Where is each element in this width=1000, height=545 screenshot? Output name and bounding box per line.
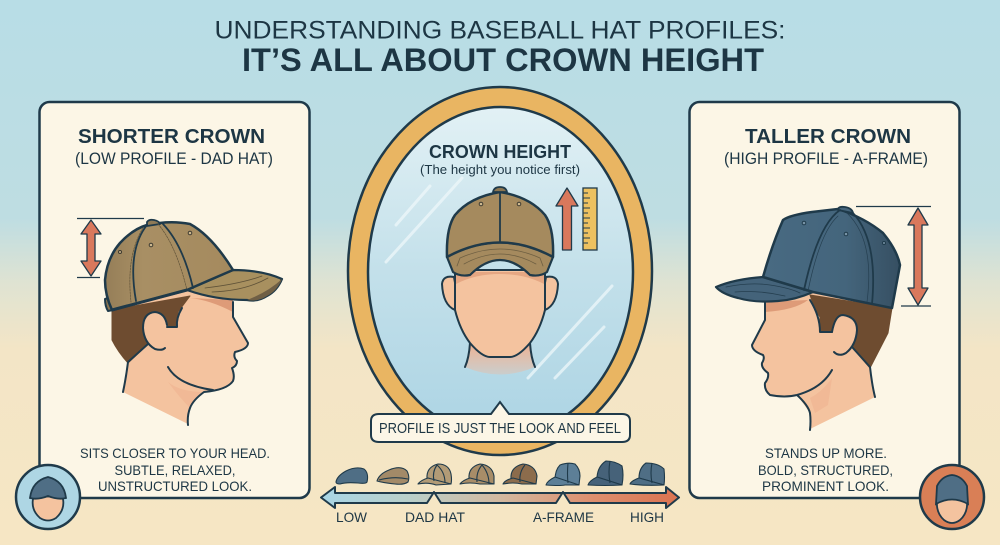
title	[214, 16, 786, 78]
text: shorter crown description: SUBTLE, RELAXED,	[114, 462, 236, 478]
callout	[371, 402, 630, 442]
heading: crown height: (The height you notice first)	[420, 162, 580, 177]
icon: side view head with low profile cap	[105, 220, 282, 425]
mirror frame	[348, 87, 652, 455]
cap 1	[336, 468, 368, 484]
heading: shorter crown: (LOW PROFILE - DAD HAT)	[75, 150, 273, 168]
scale labels: DAD HAT	[405, 509, 465, 525]
arrow: tall crown height	[856, 206, 931, 306]
icon: up arrow	[556, 188, 578, 250]
brim	[187, 270, 282, 300]
text: taller crown description: STANDS UP MORE.	[765, 445, 887, 461]
panel: shorter crown	[40, 102, 310, 498]
icon row: eight caps from low to high	[336, 461, 664, 486]
cap 3	[418, 464, 452, 485]
heading: shorter crown: SHORTER CROWN	[78, 126, 265, 148]
cap 6	[546, 463, 580, 486]
title: IT’S ALL ABOUT CROWN HEIGHT	[242, 42, 764, 78]
scale labels: A-FRAME	[533, 509, 594, 525]
cap 8	[630, 463, 664, 485]
scale labels	[336, 509, 664, 525]
text: shorter crown description: UNSTRUCTURED LOOK.	[98, 478, 252, 494]
title: UNDERSTANDING BASEBALL HAT PROFILES:	[214, 16, 786, 44]
crown	[105, 222, 233, 310]
profile scale arrow	[321, 487, 679, 508]
badge: low profile	[16, 465, 80, 529]
mirror glass	[368, 107, 633, 437]
text: shorter crown description	[80, 445, 270, 494]
icon: front view head with cap	[442, 187, 558, 374]
brim	[716, 277, 813, 302]
heading: shorter crown	[75, 126, 273, 168]
cap 5	[503, 464, 537, 484]
arrow: low crown height	[77, 218, 144, 278]
text: taller crown description: PROMINENT LOOK.	[762, 478, 889, 494]
icon: side view head with high profile cap	[716, 207, 900, 430]
heading: taller crown: (HIGH PROFILE - A-FRAME)	[724, 150, 928, 168]
scale labels: LOW	[336, 509, 368, 525]
callout: PROFILE IS JUST THE LOOK AND FEEL	[379, 420, 621, 437]
text: taller crown description: BOLD, STRUCTURED,	[758, 462, 893, 478]
panel: taller crown	[690, 102, 960, 498]
strap	[105, 297, 113, 311]
crown	[763, 209, 900, 308]
icon: ruler	[583, 188, 597, 250]
scale labels: HIGH	[630, 509, 664, 525]
badge: high profile	[920, 465, 984, 529]
crown	[447, 192, 553, 257]
brim	[447, 242, 553, 276]
cap 4	[460, 464, 494, 484]
heading: crown height: CROWN HEIGHT	[429, 141, 572, 162]
heading: crown height	[420, 141, 580, 177]
text: shorter crown description: SITS CLOSER TO YOUR HEAD.	[80, 445, 270, 461]
heading: taller crown: TALLER CROWN	[745, 126, 911, 148]
text: taller crown description	[758, 445, 893, 494]
cap 7	[588, 461, 623, 486]
cap 2	[377, 468, 409, 484]
heading: taller crown	[724, 126, 928, 168]
mirror	[348, 87, 652, 455]
